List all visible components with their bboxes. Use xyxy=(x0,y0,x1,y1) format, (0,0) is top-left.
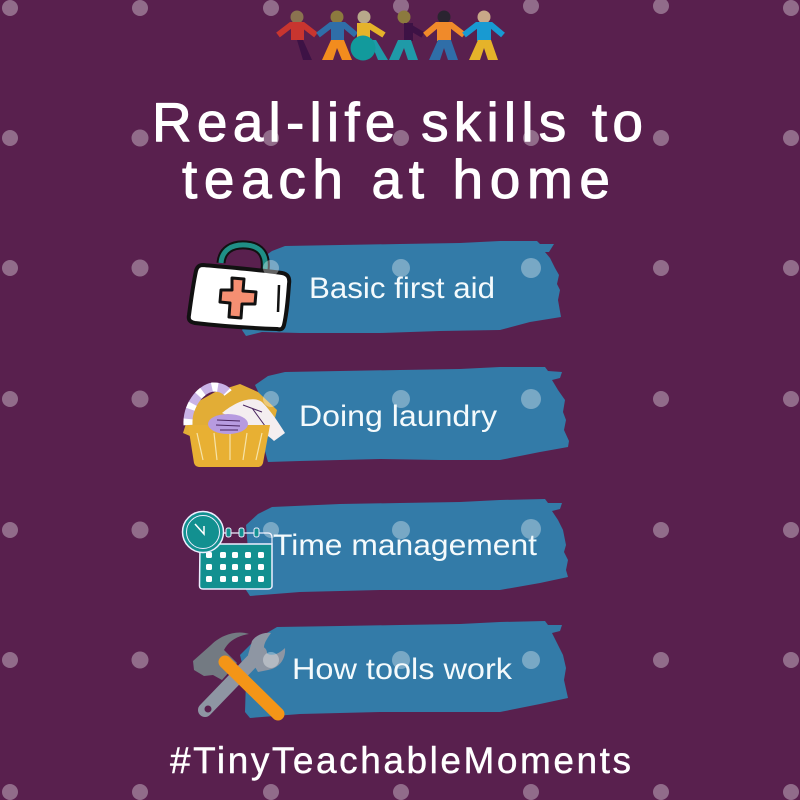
icon: hammer and wrench xyxy=(193,632,285,714)
logo: row of people holding hands xyxy=(278,10,503,60)
label: doing laundry: Doing laundry xyxy=(299,400,497,433)
person orange blue xyxy=(425,10,464,60)
icon: laundry basket xyxy=(183,384,285,467)
panel: brush stroke basic first aid xyxy=(242,241,561,336)
brush strokes xyxy=(240,241,569,718)
icon: first aid kit xyxy=(189,245,289,329)
panel: brush stroke how tools work xyxy=(240,621,568,718)
icon: clock and calendar xyxy=(182,512,272,589)
label: how tools work: How tools work xyxy=(292,653,513,686)
person purple teal xyxy=(389,10,423,60)
person wheelchair xyxy=(350,10,388,60)
panel: brush stroke time management xyxy=(246,499,568,596)
title: Real-life skills to xyxy=(152,91,643,153)
person cyan yellow xyxy=(464,10,503,60)
hashtag: #TinyTeachableMoments xyxy=(170,740,631,781)
title xyxy=(152,91,643,210)
label: basic first aid: Basic first aid xyxy=(309,272,495,305)
panel: brush stroke doing laundry xyxy=(255,367,569,462)
label: time management: Time management xyxy=(273,529,538,562)
title: teach at home xyxy=(182,148,610,210)
person red xyxy=(278,10,316,60)
person blue orange xyxy=(318,10,356,60)
